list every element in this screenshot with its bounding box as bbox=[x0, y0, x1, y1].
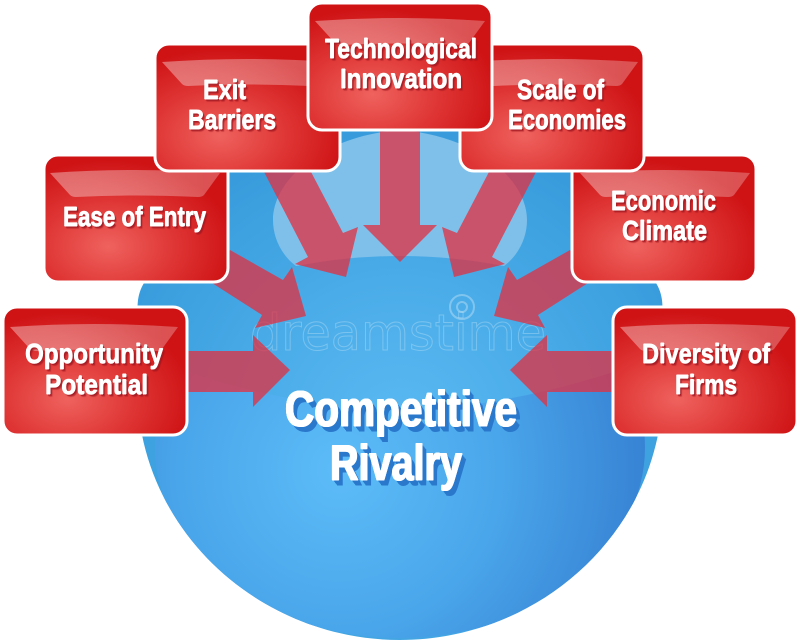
title: Competitive Rivalry: Competitive bbox=[285, 381, 517, 437]
arrow: Diversity of Firms bbox=[510, 335, 615, 407]
arrow: Technological Innovation bbox=[363, 128, 437, 262]
box: Scale of Economies: Scale of bbox=[517, 74, 605, 105]
box: Economic Climate: Economic bbox=[611, 185, 716, 216]
box: Opportunity Potential: Potential bbox=[45, 369, 148, 400]
box: Ease of Entry bbox=[44, 155, 228, 282]
box: Economic Climate: Climate bbox=[622, 215, 707, 246]
arrow: Ease of Entry bbox=[212, 250, 306, 328]
box: Technological Innovation: Technological bbox=[325, 33, 477, 64]
box: Exit Barriers bbox=[155, 44, 340, 171]
arrow: Exit Barriers bbox=[263, 170, 358, 277]
box: Diversity of Firms bbox=[613, 307, 797, 435]
sphere top highlight bbox=[273, 130, 527, 266]
arrow: Scale of Economies bbox=[442, 170, 537, 277]
box: Diversity of Firms: Diversity of bbox=[642, 338, 771, 369]
box: Economic Climate bbox=[572, 155, 756, 282]
box: Opportunity Potential: Opportunity bbox=[25, 338, 163, 369]
box: Exit Barriers: Exit bbox=[203, 74, 246, 105]
box: Ease of Entry: Ease of Entry bbox=[63, 201, 206, 232]
box: Scale of Economies bbox=[460, 44, 644, 171]
box: Technological Innovation: Innovation bbox=[340, 63, 462, 94]
arrow: Economic Climate bbox=[494, 250, 588, 328]
title: Competitive Rivalry bbox=[285, 381, 517, 491]
box: Diversity of Firms: Firms bbox=[675, 369, 737, 400]
box: Exit Barriers: Barriers bbox=[188, 104, 276, 135]
arrow: Opportunity Potential bbox=[185, 335, 290, 407]
box: Opportunity Potential bbox=[3, 307, 187, 435]
title: Competitive Rivalry: Rivalry bbox=[330, 435, 462, 491]
central sphere bbox=[137, 125, 663, 640]
box: Technological Innovation bbox=[308, 3, 492, 130]
sphere inner ball bbox=[156, 392, 645, 634]
box: Scale of Economies: Economies bbox=[508, 104, 626, 135]
arrows pointing to the centre bbox=[185, 128, 615, 407]
watermark: dreamstime bbox=[250, 304, 546, 362]
